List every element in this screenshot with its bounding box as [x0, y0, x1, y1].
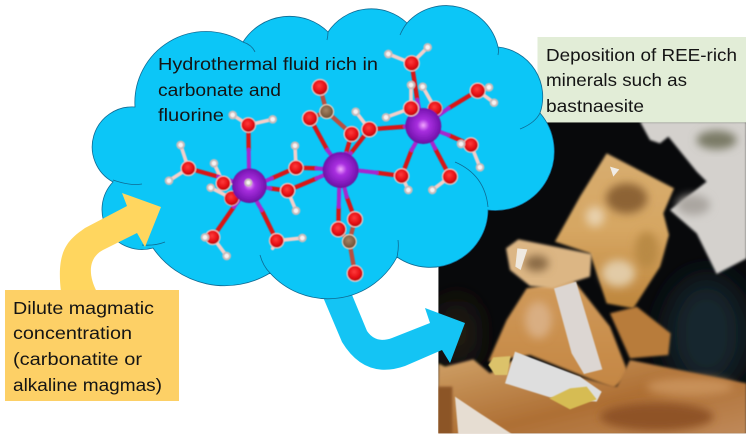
yellow patches [488, 356, 511, 375]
right middle crystal [610, 307, 671, 358]
yellow label: dilute magmatic concentration [5, 290, 179, 401]
green label: deposition of REE-rich minerals [538, 37, 746, 123]
yellow label: dilute magmatic concentration: (carbonatite or [13, 349, 142, 369]
purple bonds [218, 100, 448, 210]
yellow label: dilute magmatic concentration: Dilute magmatic [13, 298, 154, 318]
yellow arrow: magma into fluid [60, 193, 161, 292]
carbon atoms [320, 105, 356, 249]
hydrogen atoms [166, 44, 497, 259]
small crystal [506, 239, 592, 288]
cloud: hydrothermal fluid [92, 6, 554, 299]
white rock [640, 122, 747, 274]
cyan arrow: from fluid to minerals [320, 290, 465, 370]
oxygen atoms [181, 56, 485, 281]
green label: deposition of REE-rich minerals: bastnaesite [546, 96, 644, 116]
yellow label: dilute magmatic concentration: alkaline magmas) [13, 375, 162, 395]
photo: bastnaesite crystals [437, 122, 747, 435]
rare-earth atoms [224, 101, 442, 206]
cloud label: hydrothermal fluid text: Hydrothermal fluid rich in [158, 54, 378, 74]
left white patch [455, 397, 513, 435]
cloud label: hydrothermal fluid text: carbonate and [158, 80, 281, 100]
white block [505, 352, 602, 402]
O-H bonds [169, 47, 494, 256]
white stripe [554, 282, 602, 374]
molecule: REE carbonate-water complex [166, 44, 497, 281]
bottom mass [437, 359, 747, 435]
upper crystal [555, 153, 674, 308]
red bonds [188, 63, 478, 273]
yellow label: dilute magmatic concentration: concentration [13, 323, 132, 343]
cloud label: hydrothermal fluid text [158, 54, 378, 125]
cloud label: hydrothermal fluid text: fluorine [158, 105, 224, 125]
green label: deposition of REE-rich minerals: Deposition of REE-rich [546, 45, 737, 65]
middle crystal [488, 280, 629, 388]
green label: deposition of REE-rich minerals: minerals such as [546, 70, 687, 90]
